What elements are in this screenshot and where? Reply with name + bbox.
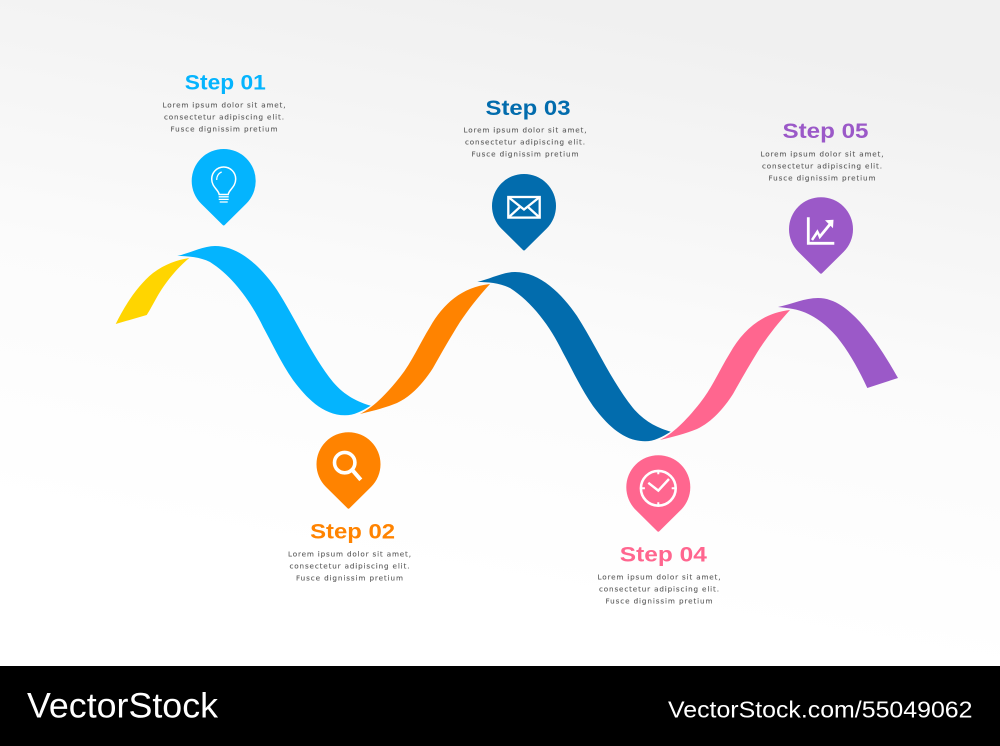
heading: step 02: Step 02	[310, 520, 395, 544]
text block: step 04: Lorem ipsum dolor sit amet,	[598, 572, 720, 582]
text block: step 05: Lorem ipsum dolor sit amet,	[760, 150, 884, 158]
source url: VectorStock.com/55049062	[668, 696, 972, 722]
heading: step 04: Step 04	[620, 544, 707, 566]
ribbon: purple step 05	[778, 298, 898, 388]
text block: step 02: Lorem ipsum dolor sit amet,	[288, 550, 411, 558]
icon: clock pin	[626, 455, 690, 532]
heading: step 01: Step 01	[185, 72, 266, 94]
ribbon: dark blue step 03	[477, 272, 671, 441]
text block: step 02: Fusce dignissim pretium	[296, 574, 403, 582]
step 02	[288, 432, 411, 582]
ribbon: wave	[116, 246, 898, 441]
text block: step 05: Fusce dignissim pretium	[768, 174, 876, 182]
text block: step 01: consectetur adipiscing elit.	[164, 112, 284, 122]
icon: envelope pin	[492, 174, 556, 250]
text block: step 05	[760, 150, 884, 182]
ribbon: blue step 01	[177, 246, 371, 415]
text block: step 03	[464, 126, 586, 158]
heading: step 03: Step 03	[486, 97, 570, 120]
step 01	[162, 72, 286, 226]
brand logo: VectorStock	[27, 686, 219, 726]
text block: step 04: consectetur adipiscing elit.	[599, 584, 719, 594]
text block: step 01: Lorem ipsum dolor sit amet,	[162, 100, 286, 110]
icon: lightbulb pin	[192, 149, 256, 226]
text block: step 05: consectetur adipiscing elit.	[762, 162, 882, 170]
icon: growth chart pin	[789, 197, 853, 274]
watermark bar	[0, 666, 1000, 746]
ribbon: yellow start	[116, 258, 189, 324]
heading: step 05: Step 05	[782, 120, 869, 143]
step 03	[464, 97, 586, 250]
text block: step 03: Lorem ipsum dolor sit amet,	[464, 126, 586, 134]
ribbon: pink step 04	[660, 310, 790, 440]
ribbon: orange step 02	[360, 284, 490, 414]
text block: step 01: Fusce dignissim pretium	[170, 124, 278, 134]
text block: step 04	[598, 572, 720, 606]
text block: step 04: Fusce dignissim pretium	[606, 596, 712, 606]
icon: search pin	[316, 432, 380, 509]
text block: step 01	[162, 100, 286, 134]
step 05	[760, 120, 884, 274]
text block: step 03: consectetur adipiscing elit.	[465, 138, 585, 146]
text block: step 02: consectetur adipiscing elit.	[290, 562, 410, 570]
text block: step 03: Fusce dignissim pretium	[472, 150, 578, 158]
step 04	[598, 455, 720, 606]
text block: step 02	[288, 550, 411, 582]
